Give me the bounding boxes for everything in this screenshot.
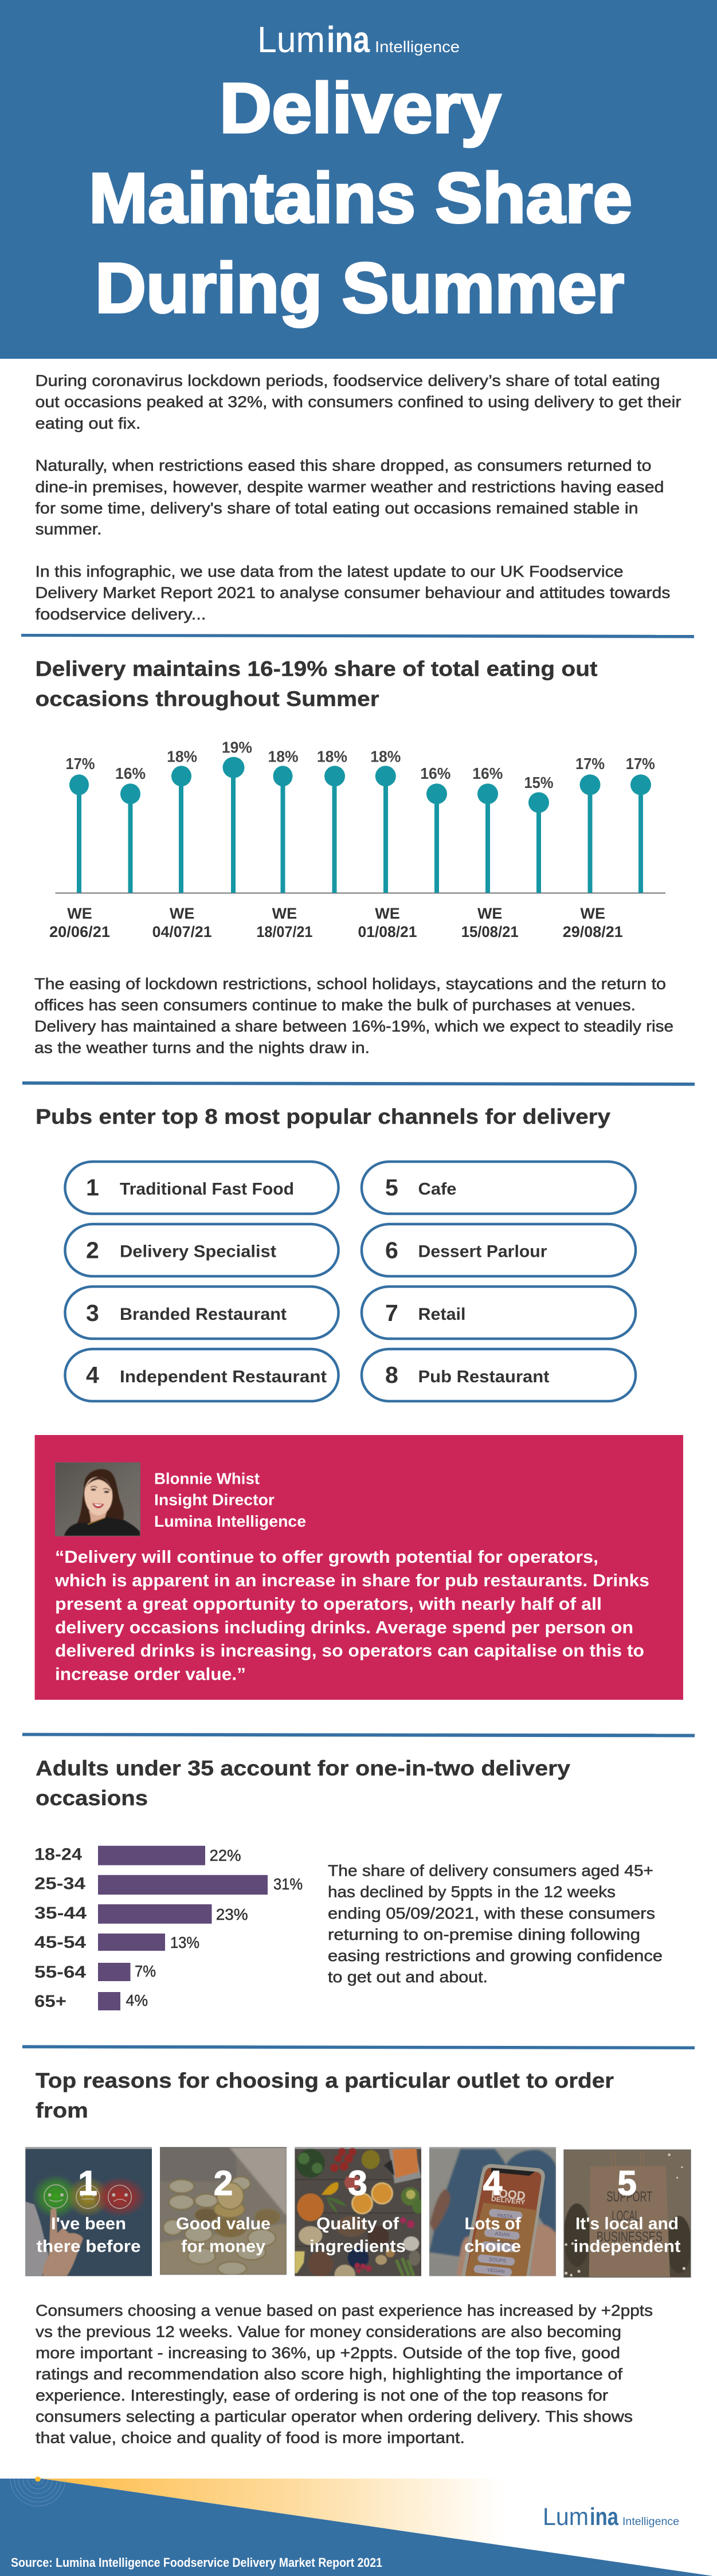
chart date axis: WE	[272, 905, 297, 922]
bar 55-64: 55-64	[34, 1963, 86, 1982]
channel 5	[385, 1174, 456, 1201]
logo: Lumina Intelligence: ina	[327, 19, 370, 60]
chart values: 16%	[420, 764, 450, 782]
chart values: 16%	[472, 764, 503, 782]
age commentary	[328, 1861, 663, 1986]
chart values	[65, 738, 655, 791]
intro text: summer.	[36, 520, 102, 538]
channel 4	[86, 1362, 327, 1388]
intro text: In this infographic, we use data from the latest update to our UK Foodservice	[36, 563, 624, 580]
heading: delivery share: occasions throughout Summer	[36, 687, 379, 711]
channel 6: Dessert Parlour	[418, 1242, 547, 1261]
reason cards	[25, 2147, 692, 2285]
heading: delivery share	[36, 657, 597, 711]
bar 65+	[34, 1991, 148, 2011]
card 5: local and independent: BUSINESSES	[597, 2229, 663, 2245]
intro text: Naturally, when restrictions eased this share dropped, as consumers returned to	[36, 457, 651, 475]
intro text: eating out fix.	[36, 414, 141, 432]
quote attribution: Blonnie Whist	[154, 1469, 260, 1487]
chart date axis: 20/06/21	[49, 923, 110, 940]
footer	[0, 2477, 713, 2576]
footer logo: Intelligence	[622, 2516, 679, 2528]
portrait photo	[55, 1463, 140, 1536]
bar 45-54: 13%	[170, 1934, 199, 1951]
channel 3: 3	[86, 1300, 99, 1326]
channel 5: 5	[385, 1174, 398, 1201]
closing commentary	[36, 2301, 653, 2446]
title	[89, 69, 632, 328]
bar 18-24: 18-24	[34, 1845, 82, 1864]
closing commentary: ratings and recommendation also score high, highlighting the importance of	[36, 2365, 622, 2383]
card 3: quality of ingredients: ingredients	[309, 2237, 406, 2256]
logo: Lumina Intelligence	[257, 19, 460, 60]
channel 3: Branded Restaurant	[120, 1305, 287, 1324]
lollipop chart: weekly delivery share	[49, 738, 665, 940]
chart date axis: WE	[375, 905, 400, 922]
bar 65+: 65+	[34, 1992, 66, 2011]
chart commentary	[34, 975, 673, 1057]
intro text: During coronavirus lockdown periods, foodservice delivery’s share of total eating	[36, 371, 660, 390]
age commentary: ending 05/09/2021, with these consumers	[328, 1904, 655, 1922]
chart date axis: WE	[67, 905, 92, 922]
chart values: 16%	[115, 764, 146, 782]
channel 1: 1	[86, 1174, 99, 1201]
heading: delivery share: Delivery maintains 16-19% share of total eating out	[36, 657, 597, 681]
bar 25-34: 31%	[273, 1875, 303, 1893]
chart values: 18%	[268, 747, 299, 765]
card 4: lots of choice: SOUPS	[488, 2256, 507, 2264]
bar 45-54	[34, 1933, 199, 1952]
chart values: 15%	[524, 774, 554, 791]
bar 65+: 4%	[126, 1991, 148, 2009]
age commentary: easing restrictions and growing confidence	[328, 1947, 663, 1965]
closing commentary: Consumers choosing a venue based on past experience has increased by +2ppts	[36, 2301, 653, 2319]
logo: Lumina Intelligence: Lum	[257, 19, 325, 60]
channel 1	[86, 1174, 294, 1201]
quote text: delivered drinks is increasing, so operators can capitalise on this to	[55, 1641, 644, 1661]
bar 18-24	[34, 1845, 241, 1865]
closing commentary: that value, choice and quality of food is more important.	[36, 2429, 465, 2446]
card 1: been there before	[25, 2147, 152, 2276]
chart commentary: The easing of lockdown restrictions, school holidays, staycations and the return to	[34, 975, 666, 993]
quote text: delivery occasions including drinks. Average spend per person on	[55, 1617, 633, 1637]
quote attribution	[154, 1469, 306, 1530]
card 5: local and independent: SUPPORT	[606, 2189, 652, 2205]
card 4: lots of choice	[429, 2147, 556, 2276]
chart values: 18%	[370, 747, 401, 765]
chart commentary: offices has seen consumers continue to make the bulk of purchases at venues.	[34, 996, 636, 1014]
card 5: local and independent	[563, 2150, 692, 2277]
chart date axis: WE	[170, 905, 194, 922]
channel 8: Pub Restaurant	[418, 1367, 549, 1386]
channel 4: Independent Restaurant	[120, 1367, 327, 1386]
closing commentary: vs the previous 12 weeks. Value for money considerations are also becoming	[36, 2323, 621, 2340]
bar 55-64	[34, 1962, 156, 1982]
chart commentary: as the weather turns and the nights draw in.	[34, 1038, 370, 1057]
intro text: Delivery Market Report 2021 to analyse consumer behaviour and attitudes towards	[36, 584, 671, 602]
chart date axis: 29/08/21	[563, 923, 623, 940]
heading: age groups	[36, 1756, 570, 1810]
age commentary: has declined by 5ppts in the 12 weeks	[328, 1883, 616, 1901]
bar chart: age groups	[34, 1845, 303, 2011]
channel 3	[86, 1300, 287, 1326]
chart values: 17%	[65, 755, 95, 773]
bar 18-24: 22%	[210, 1846, 241, 1864]
footer logo: Lum	[543, 2503, 589, 2531]
card 4: lots of choice: choice	[464, 2237, 521, 2256]
channel 7: 7	[385, 1300, 398, 1326]
bar 35-44: 23%	[216, 1905, 248, 1923]
channel 1: Traditional Fast Food	[120, 1179, 294, 1199]
intro text	[36, 371, 681, 623]
card 4: lots of choice: DELIVERY	[491, 2195, 526, 2206]
quote text: present a great opportunity to operators, with nearly half of all	[55, 1594, 602, 1614]
heading: channels: Pubs enter top 8 most popular channels for delivery	[36, 1105, 610, 1128]
chart values: 18%	[167, 747, 197, 765]
channel 5: Cafe	[418, 1179, 456, 1199]
channel 4: 4	[86, 1362, 99, 1388]
channel 6	[385, 1237, 547, 1263]
card 5: local and independent: It's local and	[575, 2214, 679, 2233]
quote attribution: Lumina Intelligence	[154, 1512, 306, 1530]
footer logo	[543, 2503, 679, 2531]
card 2: good value	[160, 2147, 287, 2275]
logo: Lumina Intelligence: Intelligence	[375, 38, 460, 56]
header banner	[0, 0, 717, 359]
closing commentary: more important - increasing to 36%, up +2ppts. Outside of the top five, good	[36, 2344, 620, 2362]
card 5: local and independent: LOCAL	[612, 2208, 640, 2224]
intro text: foodservice delivery...	[36, 605, 206, 623]
closing commentary: experience. Interestingly, ease of ordering is not one of the top reasons for	[36, 2386, 608, 2404]
channel 8	[385, 1362, 549, 1388]
heading: top reasons: Top reasons for choosing a particular outlet to order	[36, 2069, 614, 2092]
chart date axis: WE	[581, 905, 605, 922]
bar 35-44	[34, 1904, 248, 1924]
chart values: 18%	[317, 747, 347, 765]
age commentary: returning to on-premise dining following	[328, 1926, 640, 1943]
title: Delivery	[220, 69, 501, 148]
card 4: lots of choice: VEGAN	[487, 2267, 505, 2274]
bar 45-54: 45-54	[34, 1933, 86, 1952]
quote text: increase order value.”	[55, 1664, 246, 1684]
quote text: “Delivery will continue to offer growth potential for operators,	[55, 1547, 598, 1567]
chart values: 19%	[222, 738, 252, 756]
channel 2	[86, 1237, 276, 1263]
card 1: been there before: 1	[78, 2164, 97, 2202]
channel 2: Delivery Specialist	[120, 1242, 276, 1261]
card 3: quality of ingredients: Quality of	[316, 2214, 399, 2233]
footer logo: ina	[590, 2503, 619, 2531]
chart date axis: 18/07/21	[256, 923, 312, 940]
intro text: out occasions peaked at 32%, with consumers confined to using delivery to get their	[36, 393, 681, 411]
channel 2: 2	[86, 1237, 99, 1263]
chart date axis: 01/08/21	[358, 923, 417, 940]
closing commentary: consumers selecting a particular operator when ordering delivery. This shows	[36, 2408, 633, 2425]
intro text: dine-in premises, however, despite warmer weather and restrictions having eased	[36, 478, 664, 496]
age commentary: The share of delivery consumers aged 45+	[328, 1861, 653, 1880]
channel 7	[385, 1300, 465, 1326]
channel ranking list	[65, 1162, 636, 1401]
quote text: which is apparent in an increase in share for pub restaurants. Drinks	[54, 1570, 649, 1590]
card 2: good value: Good value	[176, 2214, 271, 2233]
chart date axis	[49, 905, 623, 940]
age commentary: to get out and about.	[328, 1968, 488, 1986]
card 3: quality of ingredients	[295, 2147, 425, 2285]
chart values: 17%	[626, 755, 655, 773]
bar 25-34	[34, 1875, 303, 1895]
channel 8: 8	[385, 1362, 398, 1388]
card 4: lots of choice: ASIAN	[495, 2230, 510, 2238]
quote text	[54, 1547, 649, 1684]
card 1: been there before: I've been	[51, 2214, 126, 2233]
heading: top reasons: from	[36, 2099, 88, 2122]
title: During Summer	[95, 249, 624, 328]
chart date axis: 04/07/21	[152, 923, 212, 940]
card 4: lots of choice: Lots of	[464, 2214, 521, 2233]
source note: Source: Lumina Intelligence Foodservice Delivery Market Report 2021	[11, 2555, 382, 2570]
title: Maintains Share	[89, 159, 632, 238]
chart date axis: 15/08/21	[461, 923, 519, 940]
card 4: lots of choice: PASTA	[497, 2212, 513, 2220]
card 4: lots of choice: 4	[483, 2164, 503, 2202]
intro text: for some time, delivery's share of total eating out occasions remained stable in	[36, 499, 638, 517]
chart values: 17%	[575, 755, 605, 773]
bar 35-44: 35-44	[34, 1904, 87, 1923]
heading: age groups: occasions	[36, 1786, 148, 1810]
card 5: local and independent: 5	[617, 2164, 637, 2202]
chart date axis: WE	[477, 905, 502, 922]
bar 55-64: 7%	[135, 1962, 156, 1980]
channel 6: 6	[385, 1237, 398, 1263]
heading: age groups: Adults under 35 account for one-in-two delivery	[36, 1756, 570, 1780]
chart commentary: Delivery has maintained a share between 16%-19%, which we expect to steadily rise	[34, 1017, 673, 1035]
card 5: local and independent: independent	[573, 2237, 681, 2256]
card 1: been there before: there before	[37, 2237, 141, 2256]
card 4: lots of choice: SEAFOOD	[489, 2238, 514, 2246]
card 2: good value: 2	[214, 2164, 233, 2202]
card 3: quality of ingredients: 3	[348, 2164, 367, 2202]
heading: top reasons	[36, 2069, 614, 2122]
channel 7: Retail	[418, 1305, 465, 1324]
bar 25-34: 25-34	[34, 1875, 85, 1893]
card 4: lots of choice: FOOD	[491, 2186, 526, 2203]
card 2: good value: for money	[181, 2237, 265, 2256]
quote panel	[35, 1435, 683, 1700]
quote attribution: Insight Director	[154, 1491, 275, 1509]
